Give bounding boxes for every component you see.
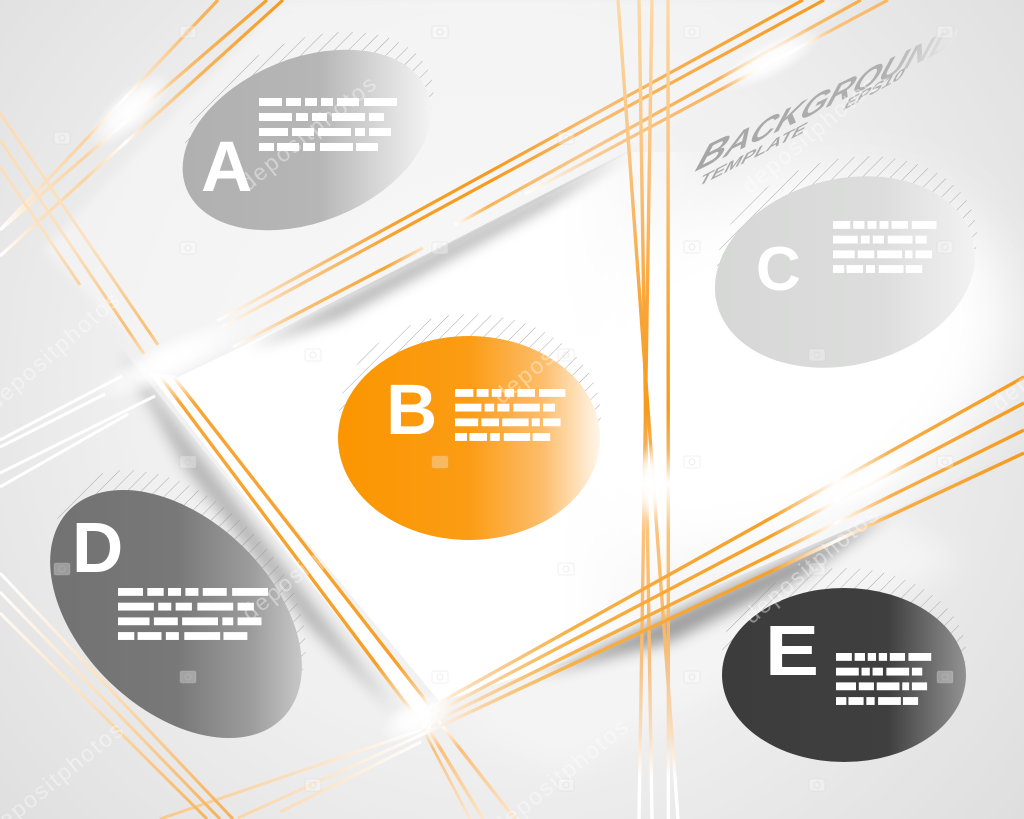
callout A bbox=[156, 0, 460, 265]
title: BACKGROUND TEMPLATE EPS10 bbox=[687, 10, 971, 191]
text lines D bbox=[118, 588, 268, 640]
text lines B bbox=[455, 389, 565, 441]
hatching A bbox=[158, 0, 460, 247]
light flares bbox=[78, 17, 925, 754]
hatching B bbox=[339, 314, 601, 518]
oval B bbox=[338, 336, 600, 540]
lower light area bbox=[450, 515, 960, 770]
letter B: B bbox=[386, 371, 437, 450]
watermark text: depositphotos bbox=[737, 72, 881, 199]
line band: lower left faded bbox=[160, 730, 421, 819]
title word: BACKGROUND: BACKGROUND bbox=[687, 10, 971, 182]
shadow: left descending edge bbox=[136, 382, 386, 701]
hatching E bbox=[722, 568, 966, 740]
watermark text: depositphotos bbox=[739, 502, 883, 629]
watermark text: depositphotos bbox=[237, 501, 383, 626]
hatching C bbox=[696, 130, 998, 374]
subtitle: EPS10: EPS10 bbox=[840, 64, 909, 115]
watermark text: depositphotos bbox=[235, 71, 381, 196]
line band: left white bbox=[0, 376, 155, 487]
oval E bbox=[722, 588, 966, 762]
oval C bbox=[694, 150, 996, 394]
callout B bbox=[338, 314, 601, 540]
shadow: upper band edge bbox=[260, 158, 618, 347]
oval D bbox=[3, 442, 349, 786]
left white strip bbox=[148, 372, 432, 738]
line band: left descending upper part bbox=[0, 113, 158, 354]
right white glow bbox=[670, 194, 1016, 548]
callout D bbox=[3, 422, 353, 786]
line band: lower right bbox=[421, 377, 1024, 735]
callout C bbox=[694, 130, 998, 394]
letter E: E bbox=[765, 612, 819, 691]
watermark text: depositphotos bbox=[489, 282, 633, 409]
hatching D bbox=[7, 422, 353, 766]
text lines C bbox=[833, 221, 936, 273]
oval A bbox=[156, 15, 458, 265]
upper light band bbox=[43, 0, 850, 378]
line band: left descending main part bbox=[160, 376, 515, 819]
text lines A bbox=[259, 98, 397, 151]
letter D: D bbox=[72, 509, 123, 588]
line band: upper diagonal bbox=[217, 0, 888, 347]
text lines E bbox=[836, 653, 931, 705]
line band: vertical bbox=[618, 0, 678, 819]
central white panel bbox=[172, 152, 720, 702]
letter A: A bbox=[201, 128, 252, 207]
line band: bottom-left bbox=[0, 573, 233, 819]
callout E bbox=[722, 568, 966, 762]
line band: top-left bbox=[0, 0, 283, 256]
subtitle: TEMPLATE: TEMPLATE bbox=[695, 119, 811, 191]
shadow: lower band edge bbox=[540, 513, 890, 675]
letter C: C bbox=[756, 235, 801, 304]
